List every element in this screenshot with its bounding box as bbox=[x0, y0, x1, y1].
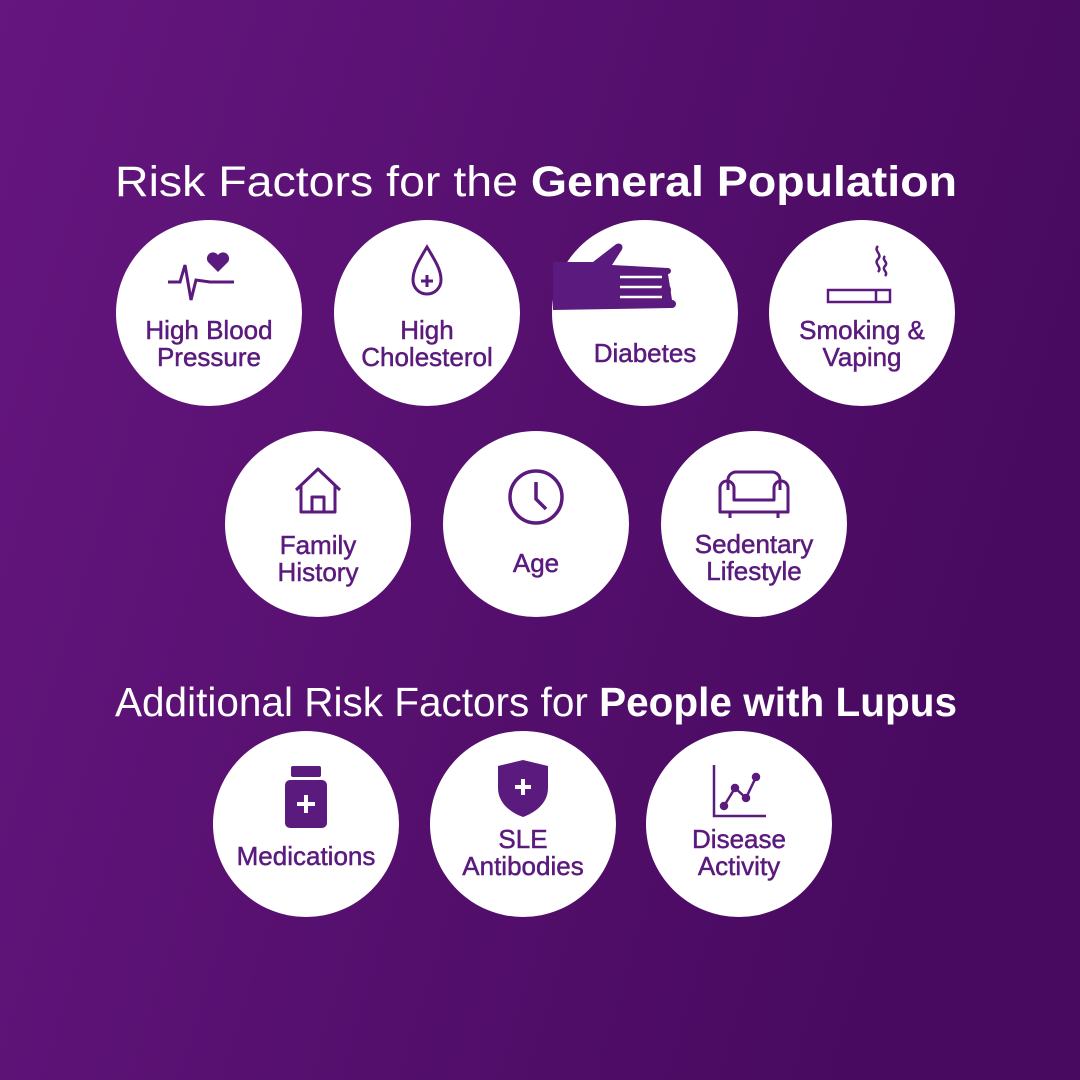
label: medications: Medications bbox=[237, 841, 375, 871]
label: sle antibodies: Antibodies bbox=[462, 851, 584, 881]
panel: general population risk factors bbox=[116, 220, 955, 917]
label: age: Age bbox=[513, 548, 559, 578]
title: general population: Risk Factors for the General Population bbox=[115, 158, 957, 206]
icon: pill bottle bbox=[285, 766, 327, 828]
icon: line chart bbox=[714, 765, 766, 816]
icon: couch bbox=[720, 472, 788, 518]
label: smoking & vaping: Smoking & bbox=[799, 315, 925, 345]
icon: shield bbox=[498, 760, 548, 817]
title: people with lupus: Additional Risk Factors for People with Lupus bbox=[115, 679, 957, 725]
icon: clock bbox=[510, 471, 562, 523]
label: disease activity: Activity bbox=[698, 851, 780, 881]
label: diabetes: Diabetes bbox=[594, 338, 696, 368]
label: sedentary lifestyle: Sedentary bbox=[695, 529, 813, 559]
label: high blood pressure: High Blood bbox=[145, 315, 273, 345]
label: high cholesterol: High bbox=[400, 315, 454, 345]
icon: cigarette bbox=[828, 246, 890, 302]
icon: drop bbox=[413, 247, 441, 294]
label: smoking & vaping: Vaping bbox=[822, 342, 902, 372]
label: high cholesterol: Cholesterol bbox=[361, 342, 493, 372]
label: disease activity: Disease bbox=[692, 824, 786, 854]
label: high blood pressure: Pressure bbox=[157, 342, 261, 372]
label: family history: History bbox=[278, 557, 358, 587]
icon: heartbeat bbox=[168, 252, 234, 300]
icon: hand bbox=[553, 244, 676, 310]
label: sedentary lifestyle: Lifestyle bbox=[706, 556, 802, 586]
label: family history: Family bbox=[280, 530, 356, 560]
label: sle antibodies: SLE bbox=[498, 824, 548, 854]
icon: house bbox=[296, 469, 340, 512]
